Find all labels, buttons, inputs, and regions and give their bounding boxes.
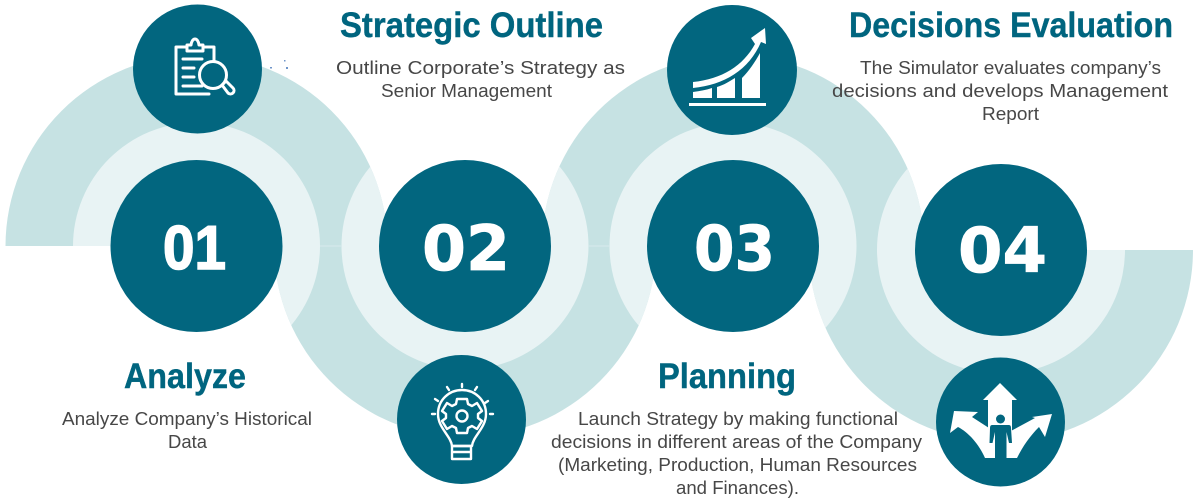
text: Planning description: decisions in different areas of the Company [551, 431, 923, 452]
text: Analyze description [62, 408, 312, 452]
step 02 number circle: 02 [422, 212, 510, 285]
text: Planning description: and Finances). [676, 477, 799, 498]
icon: light bulb with gear [397, 355, 526, 484]
S-curve ribbon background [6, 55, 1193, 442]
icon: clipboard with magnifier [133, 4, 262, 134]
text: Decisions Evaluation description: Report [982, 103, 1039, 124]
step 03 number circle: 03 [694, 212, 775, 285]
heading: Analyze: Analyze [124, 357, 246, 396]
heading: Strategic Outline: Strategic Outline [340, 6, 603, 45]
step 04 number circle: 04 [958, 214, 1047, 287]
step 01 number circle: 01 [163, 214, 226, 283]
step 02 number circle [379, 160, 551, 332]
stray specks near first icon [270, 60, 288, 69]
text: Analyze description: Data [168, 431, 208, 452]
text: Planning description: Launch Strategy by making functional [578, 408, 898, 429]
text: Decisions Evaluation description: decisions and develops Management [832, 80, 1168, 101]
icon: rising bar chart with arrow [667, 5, 797, 135]
text: Decisions Evaluation description [832, 57, 1168, 124]
icon: person at crossroads with three arrows [936, 358, 1065, 486]
heading: Decisions Evaluation: Decisions Evaluation [849, 6, 1173, 45]
step 03 number circle [647, 160, 819, 332]
heading: Planning: Planning [658, 357, 796, 396]
text: Strategic Outline description: Senior Management [381, 80, 552, 101]
text: Decisions Evaluation description: The Simulator evaluates company’s [860, 57, 1161, 78]
step 01 number circle [110, 160, 282, 332]
text: Strategic Outline description: Outline Corporate’s Strategy as [336, 57, 625, 78]
text: Planning description: (Marketing, Production, Human Resources [558, 454, 917, 475]
text: Planning description [551, 408, 923, 498]
text: Analyze description: Analyze Company’s Historical [62, 408, 312, 429]
text: Strategic Outline description [336, 57, 625, 101]
step 04 number circle [915, 164, 1087, 336]
